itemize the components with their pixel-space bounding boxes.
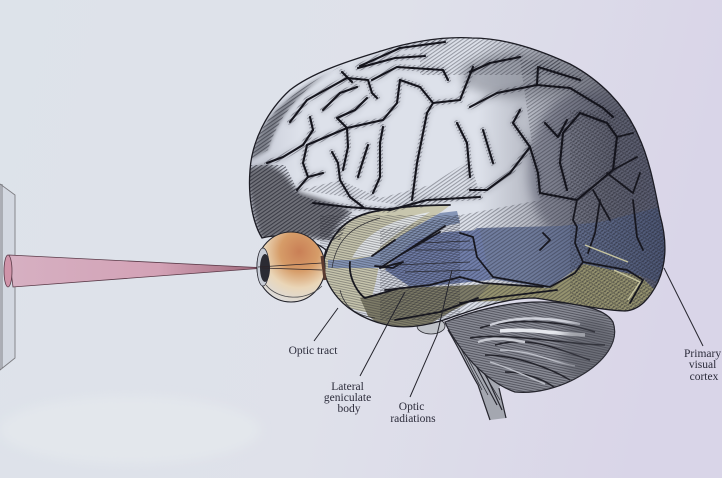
label: optic radiations: radiations — [390, 413, 436, 425]
blue fan — [385, 230, 490, 285]
eye — [257, 232, 325, 302]
leader line: primary visual cortex — [664, 268, 703, 346]
label: primary visual cortex: visual — [689, 359, 716, 371]
soft shading around the gyri — [264, 39, 539, 212]
temporal tan region — [474, 264, 654, 310]
hatched shadow along the sulci — [267, 42, 617, 210]
shaded left edge of the frontal lobe — [245, 165, 352, 240]
spinal cord and brainstem — [448, 330, 506, 420]
pituitary region — [417, 318, 445, 334]
leader line: optic tract — [314, 308, 338, 341]
label: primary visual cortex: cortex — [690, 371, 719, 383]
frontal and parietal sulci — [267, 42, 617, 210]
pale strip inside the temporal lobe — [352, 212, 430, 258]
upper rim shading — [252, 72, 330, 161]
label: lateral geniculate body: body — [338, 403, 361, 415]
label: lateral geniculate body: geniculate — [324, 392, 371, 404]
fine lines of the temporal lobe — [332, 218, 480, 318]
blue stripe of the optic tract — [328, 211, 460, 268]
olive lower temporal lobe — [360, 284, 490, 330]
pale ridge highlight in the occipital lobe — [585, 245, 640, 300]
occipital and temporal sulci — [322, 133, 643, 320]
cone of light entering the eye — [4, 255, 258, 287]
parietal and occipital shading — [524, 88, 632, 226]
label: primary visual cortex: Primary — [684, 348, 721, 360]
cerebellum — [444, 301, 616, 393]
label: optic tract: Optic tract — [289, 345, 338, 357]
label: optic radiations: Optic — [399, 401, 424, 413]
leader line: lateral geniculate body — [360, 292, 405, 376]
visual field panel — [0, 184, 15, 370]
blue band of the optic radiations — [382, 205, 668, 290]
label: lateral geniculate body: Lateral — [331, 381, 364, 393]
temporal lobe front — [322, 205, 450, 312]
leader line: optic radiations — [410, 270, 452, 397]
cerebrum — [245, 35, 680, 330]
hatching layers — [250, 165, 352, 240]
